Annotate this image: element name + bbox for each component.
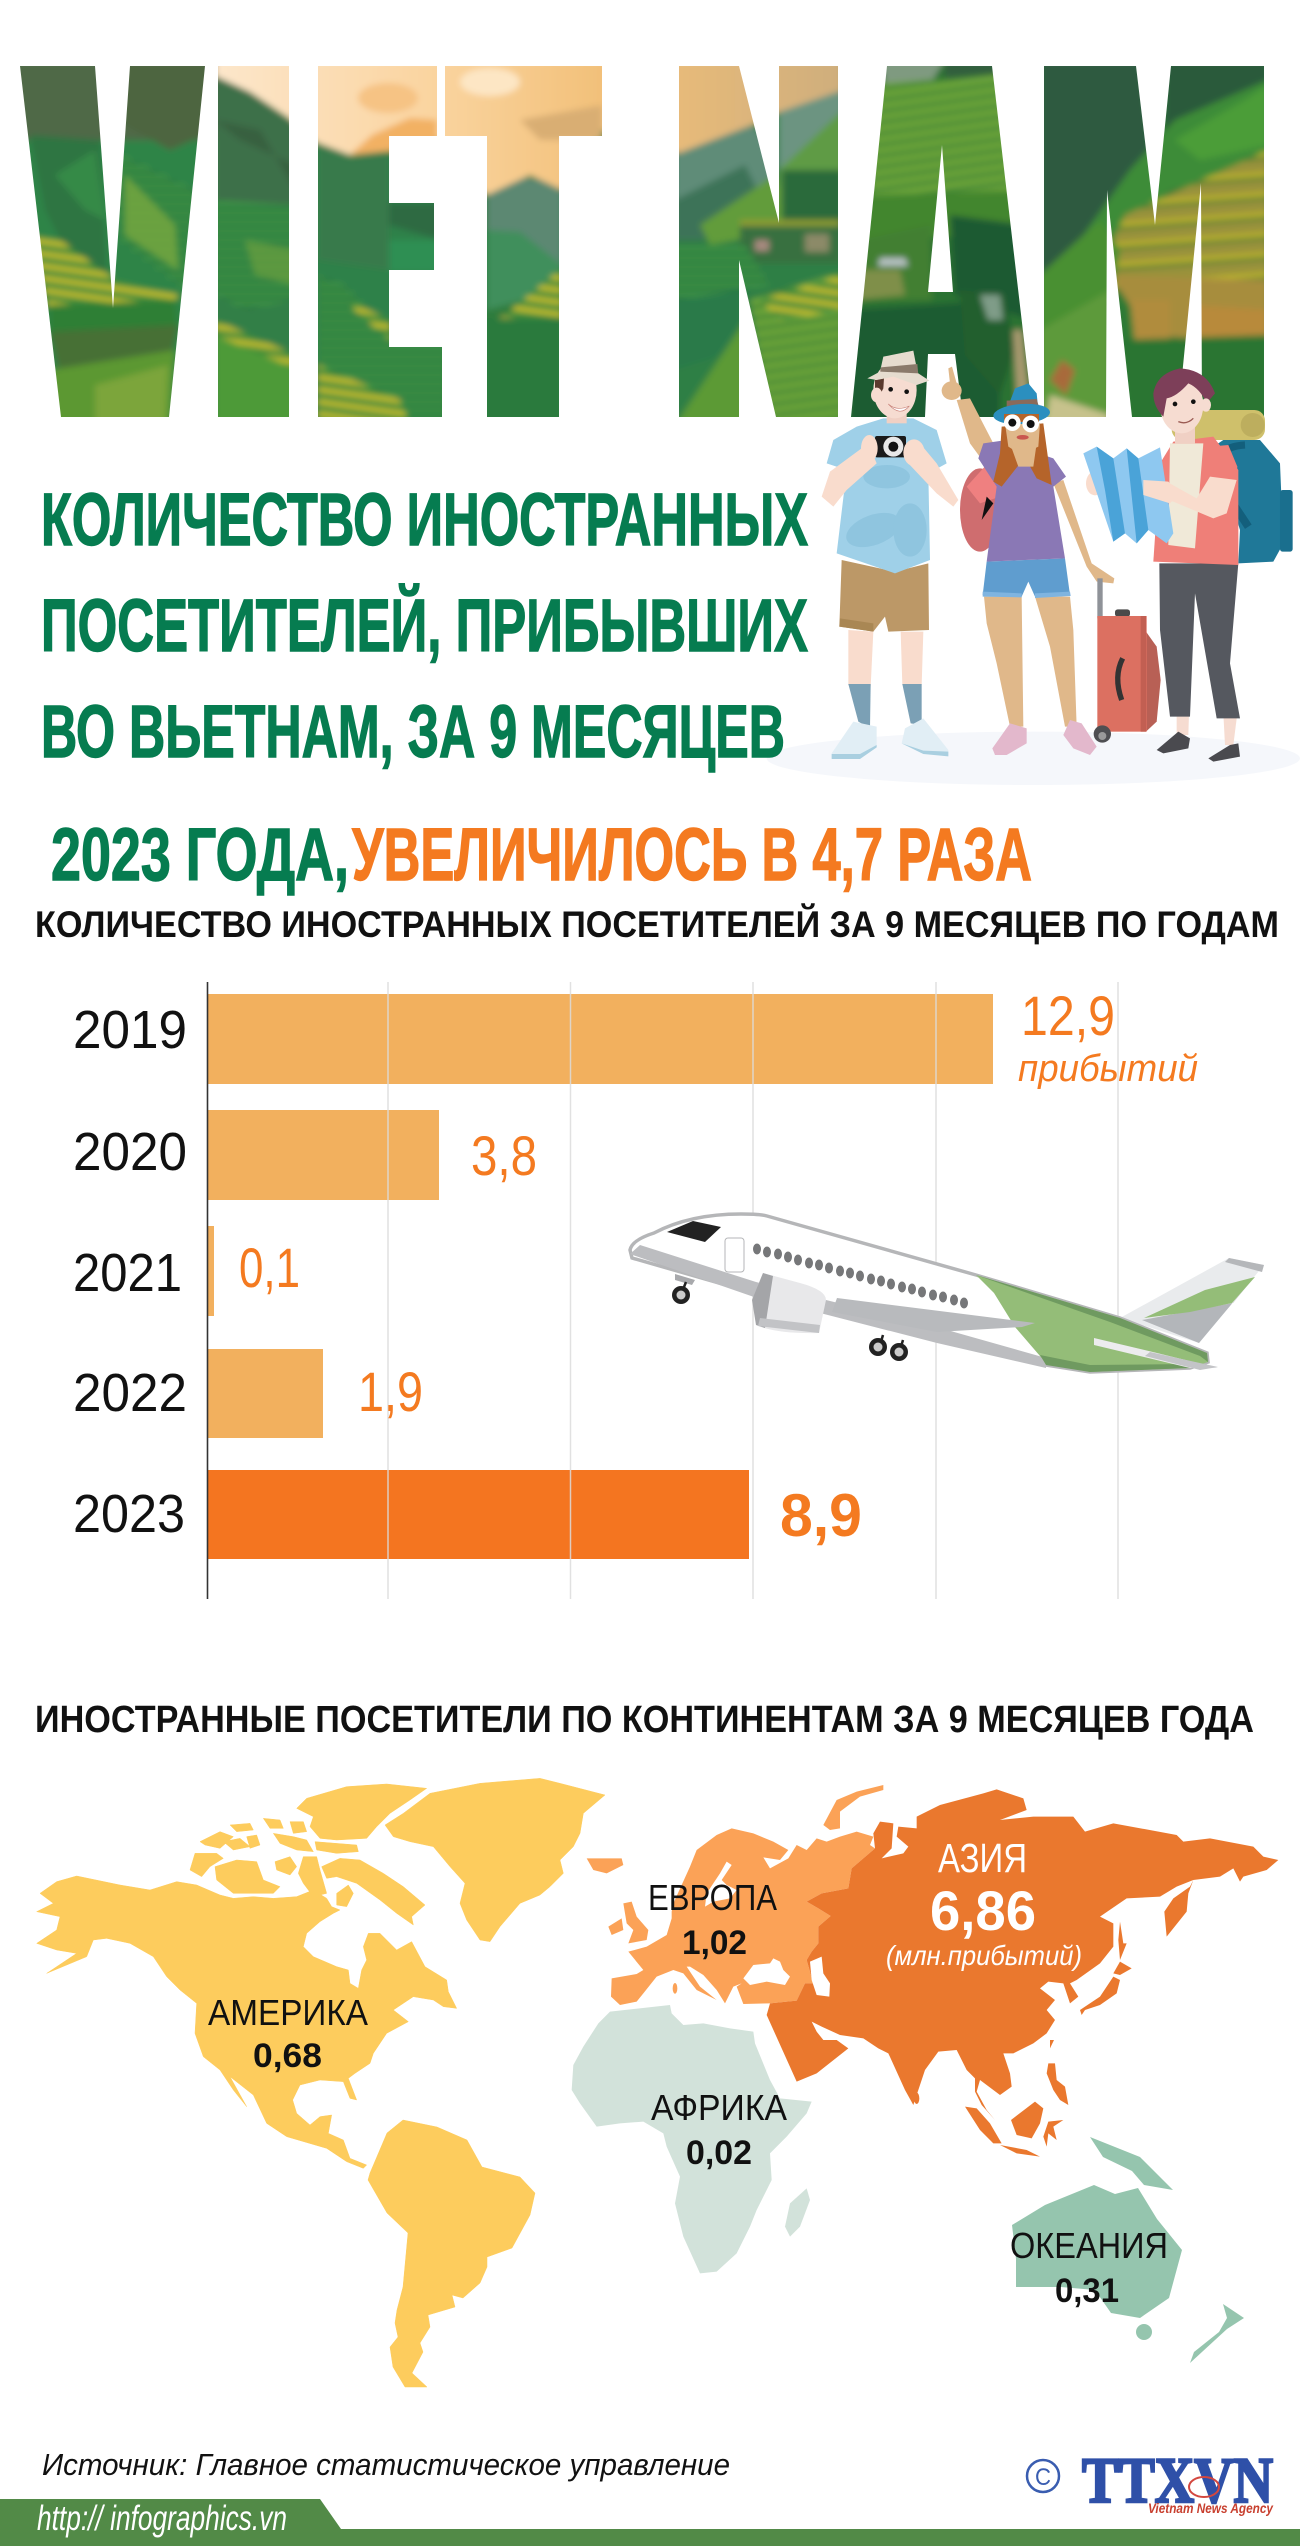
map: Oceania: [1012, 2137, 1244, 2363]
label: Oceania: 0,31: [1055, 2272, 1119, 2310]
year labels: 2021: [73, 1243, 182, 1303]
value labels: 8,9: [780, 1482, 862, 1549]
label: America: [208, 1992, 368, 2075]
value labels: 1,9: [358, 1360, 423, 1423]
bar 2021: [208, 1226, 214, 1316]
footer banner: http:// infographics.vn: [37, 2499, 287, 2538]
landing gear: [672, 1274, 908, 1361]
title line 4: [51, 813, 1032, 896]
tourist: man with map: [1083, 368, 1293, 762]
label: America: АМЕРИКА: [208, 1992, 368, 2033]
label: Africa: АФРИКА: [651, 2087, 787, 2128]
footer banner: [0, 2499, 1300, 2546]
bar 2019: [208, 994, 993, 1084]
title line 3: ВО ВЬЕТНАМ, ЗА 9 МЕСЯЦЕВ: [41, 690, 785, 773]
tourist: woman with suitcase: [942, 367, 1161, 755]
world map: [37, 1778, 1278, 2387]
year labels: 2019: [73, 1000, 187, 1060]
year labels: [73, 1000, 187, 1544]
label: Asia: (млн.прибытий): [886, 1940, 1082, 1971]
title line 2: ПОСЕТИТЕЛЕЙ, ПРИБЫВШИХ: [41, 583, 808, 667]
year labels: 2020: [73, 1122, 187, 1182]
label: Africa: [651, 2087, 787, 2172]
bar chart: [73, 982, 1198, 1599]
title photo: VIET NAM: [0, 60, 1300, 430]
icon: airplane: [630, 1214, 1264, 1372]
map: inland seas: [705, 1862, 830, 1997]
illustration: three tourists: [767, 351, 1300, 785]
bar 2022: [208, 1349, 323, 1438]
label: Asia: АЗИЯ: [938, 1835, 1027, 1881]
cabin windows: [753, 1244, 968, 1308]
bar 2023: [208, 1470, 749, 1559]
logo: TTXVN: C: [1035, 2464, 1051, 2491]
tourist: man with camera: [822, 351, 958, 759]
map: Americas: [37, 1778, 605, 2387]
map: Asia: [767, 1789, 1278, 2157]
source note: Источник: Главное статистическое управление: [42, 2447, 730, 2482]
label: America: 0,68: [253, 2037, 322, 2075]
value labels: прибытий: [1018, 1048, 1198, 1090]
label: Asia: [886, 1835, 1082, 1971]
label: Europe: 1,02: [682, 1924, 747, 1962]
value labels: [239, 984, 1198, 1549]
year labels: 2022: [73, 1363, 187, 1423]
label: Europe: ЕВРОПА: [648, 1877, 777, 1918]
label: Oceania: ОКЕАНИЯ: [1010, 2225, 1168, 2266]
title line 1: КОЛИЧЕСТВО ИНОСТРАННЫХ: [41, 478, 808, 561]
value labels: 3,8: [471, 1124, 537, 1187]
year labels: 2023: [73, 1484, 185, 1544]
label: Asia: 6,86: [930, 1879, 1036, 1942]
value labels: 0,1: [239, 1236, 300, 1299]
label: Oceania: [1010, 2225, 1168, 2310]
map: Europe: [587, 1785, 883, 2005]
logo: TTXVN: Vietnam News Agency: [1148, 2500, 1274, 2516]
map: Africa: [572, 2005, 812, 2273]
bar 2020: [208, 1110, 439, 1200]
label: Europe: [648, 1877, 777, 1962]
label: Africa: 0,02: [686, 2134, 752, 2172]
title line 4: 2023 ГОДА,: [51, 813, 349, 896]
value labels: 12,9: [1021, 984, 1115, 1047]
